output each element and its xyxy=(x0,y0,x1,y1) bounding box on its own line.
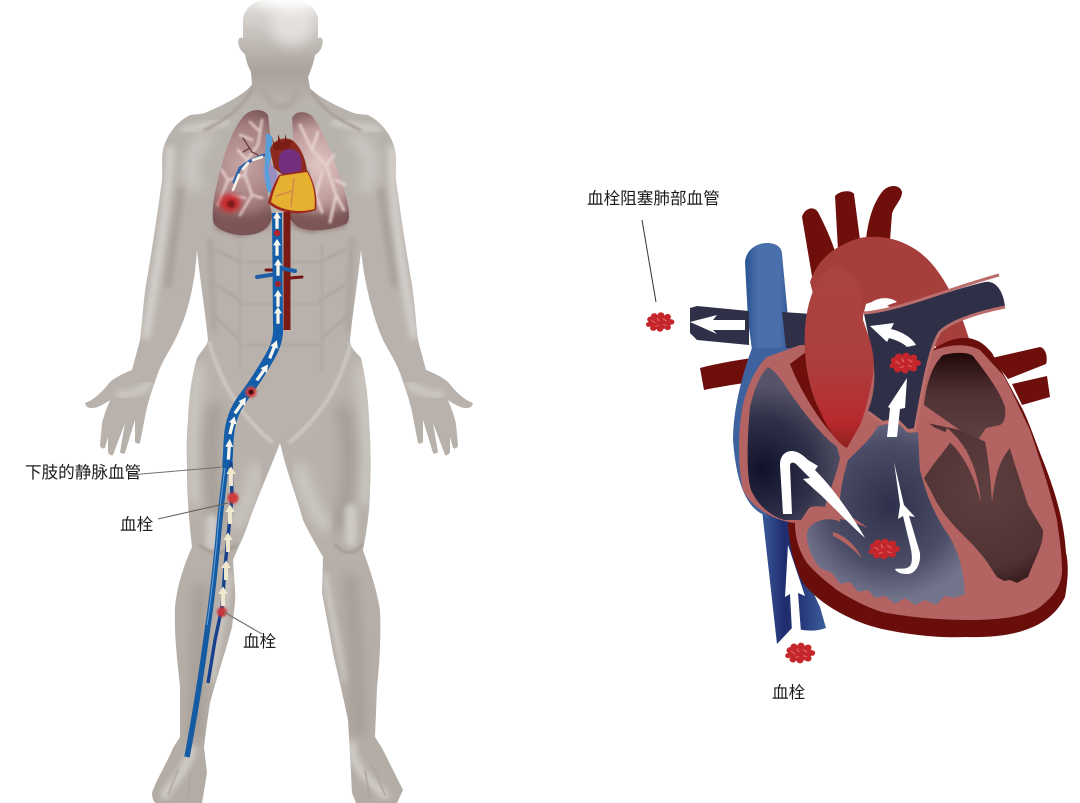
second leg vein xyxy=(208,462,232,683)
lungs xyxy=(213,110,349,236)
main leg vein xyxy=(187,466,226,757)
arrow: ventricle straight xyxy=(894,462,920,574)
heart outer wall xyxy=(788,338,1068,637)
left ventricle xyxy=(922,422,1043,583)
label: clot lower xyxy=(224,612,277,651)
body shading xyxy=(120,0,440,798)
pulmonary branches with clot path xyxy=(233,138,264,190)
pulmonary trunk xyxy=(864,282,1005,429)
label: clot upper xyxy=(120,503,228,534)
body silhouette xyxy=(85,0,473,803)
clot in pulmonary trunk xyxy=(889,353,921,373)
label: clot upper: 血栓 xyxy=(120,515,154,534)
vessel clots xyxy=(217,230,281,617)
superior vena cava xyxy=(745,243,791,350)
tricuspid valve leaflets xyxy=(810,506,868,558)
lung branches xyxy=(218,120,345,222)
arrow: atrium to ventricle xyxy=(780,451,865,538)
papillary muscles xyxy=(922,420,1012,503)
clot below vena cava xyxy=(785,643,815,663)
aorta xyxy=(284,212,290,330)
right ventricle xyxy=(807,422,965,605)
lung embolism clot xyxy=(219,194,241,212)
right lung xyxy=(288,112,349,230)
inferior vena cava xyxy=(227,213,278,468)
lung lower shadow xyxy=(216,210,347,236)
label: clot lower: 血栓 xyxy=(243,632,277,651)
right atrial aortic strip xyxy=(790,352,844,446)
label: leg vein: 下肢的静脉血管 xyxy=(25,463,141,482)
right atrium xyxy=(748,367,840,520)
aorta ascending xyxy=(805,268,874,448)
pulmonary veins right xyxy=(992,347,1050,405)
clot exiting pulmonary artery xyxy=(646,312,674,332)
human body figure xyxy=(85,0,473,803)
white flow arrows xyxy=(690,315,920,632)
label: pulmonary embolism xyxy=(587,189,720,302)
label: leg vein xyxy=(25,463,223,482)
label: clot below heart: 血栓 xyxy=(772,683,806,702)
white arrows inside veins xyxy=(224,212,282,460)
pulmonary trunk wall highlight xyxy=(864,275,1005,431)
aorta branches xyxy=(802,186,902,282)
label: pulmonary embolism: 血栓阻塞肺部血管 xyxy=(587,189,720,208)
heart muscle wall xyxy=(739,345,1062,620)
left pulmonary artery behind vena cava xyxy=(690,306,749,345)
small heart xyxy=(263,133,317,213)
aortic arch xyxy=(810,237,970,350)
inferior vena cava xyxy=(762,510,826,644)
left lung xyxy=(213,110,272,235)
arrow: curved pulmonary xyxy=(870,323,916,347)
arrow: pulmonary valve xyxy=(887,378,907,437)
clot in right ventricle xyxy=(868,539,900,559)
vena cava atrial blue wall xyxy=(733,348,790,520)
major vessels xyxy=(187,212,302,757)
crossing veins xyxy=(266,270,302,278)
left atrium xyxy=(924,353,1005,440)
large heart diagram xyxy=(646,186,1068,663)
arrow: left pulmonary artery xyxy=(690,315,745,334)
arrow: vena cava upward xyxy=(785,545,805,632)
pulmonary vein left xyxy=(700,358,752,390)
